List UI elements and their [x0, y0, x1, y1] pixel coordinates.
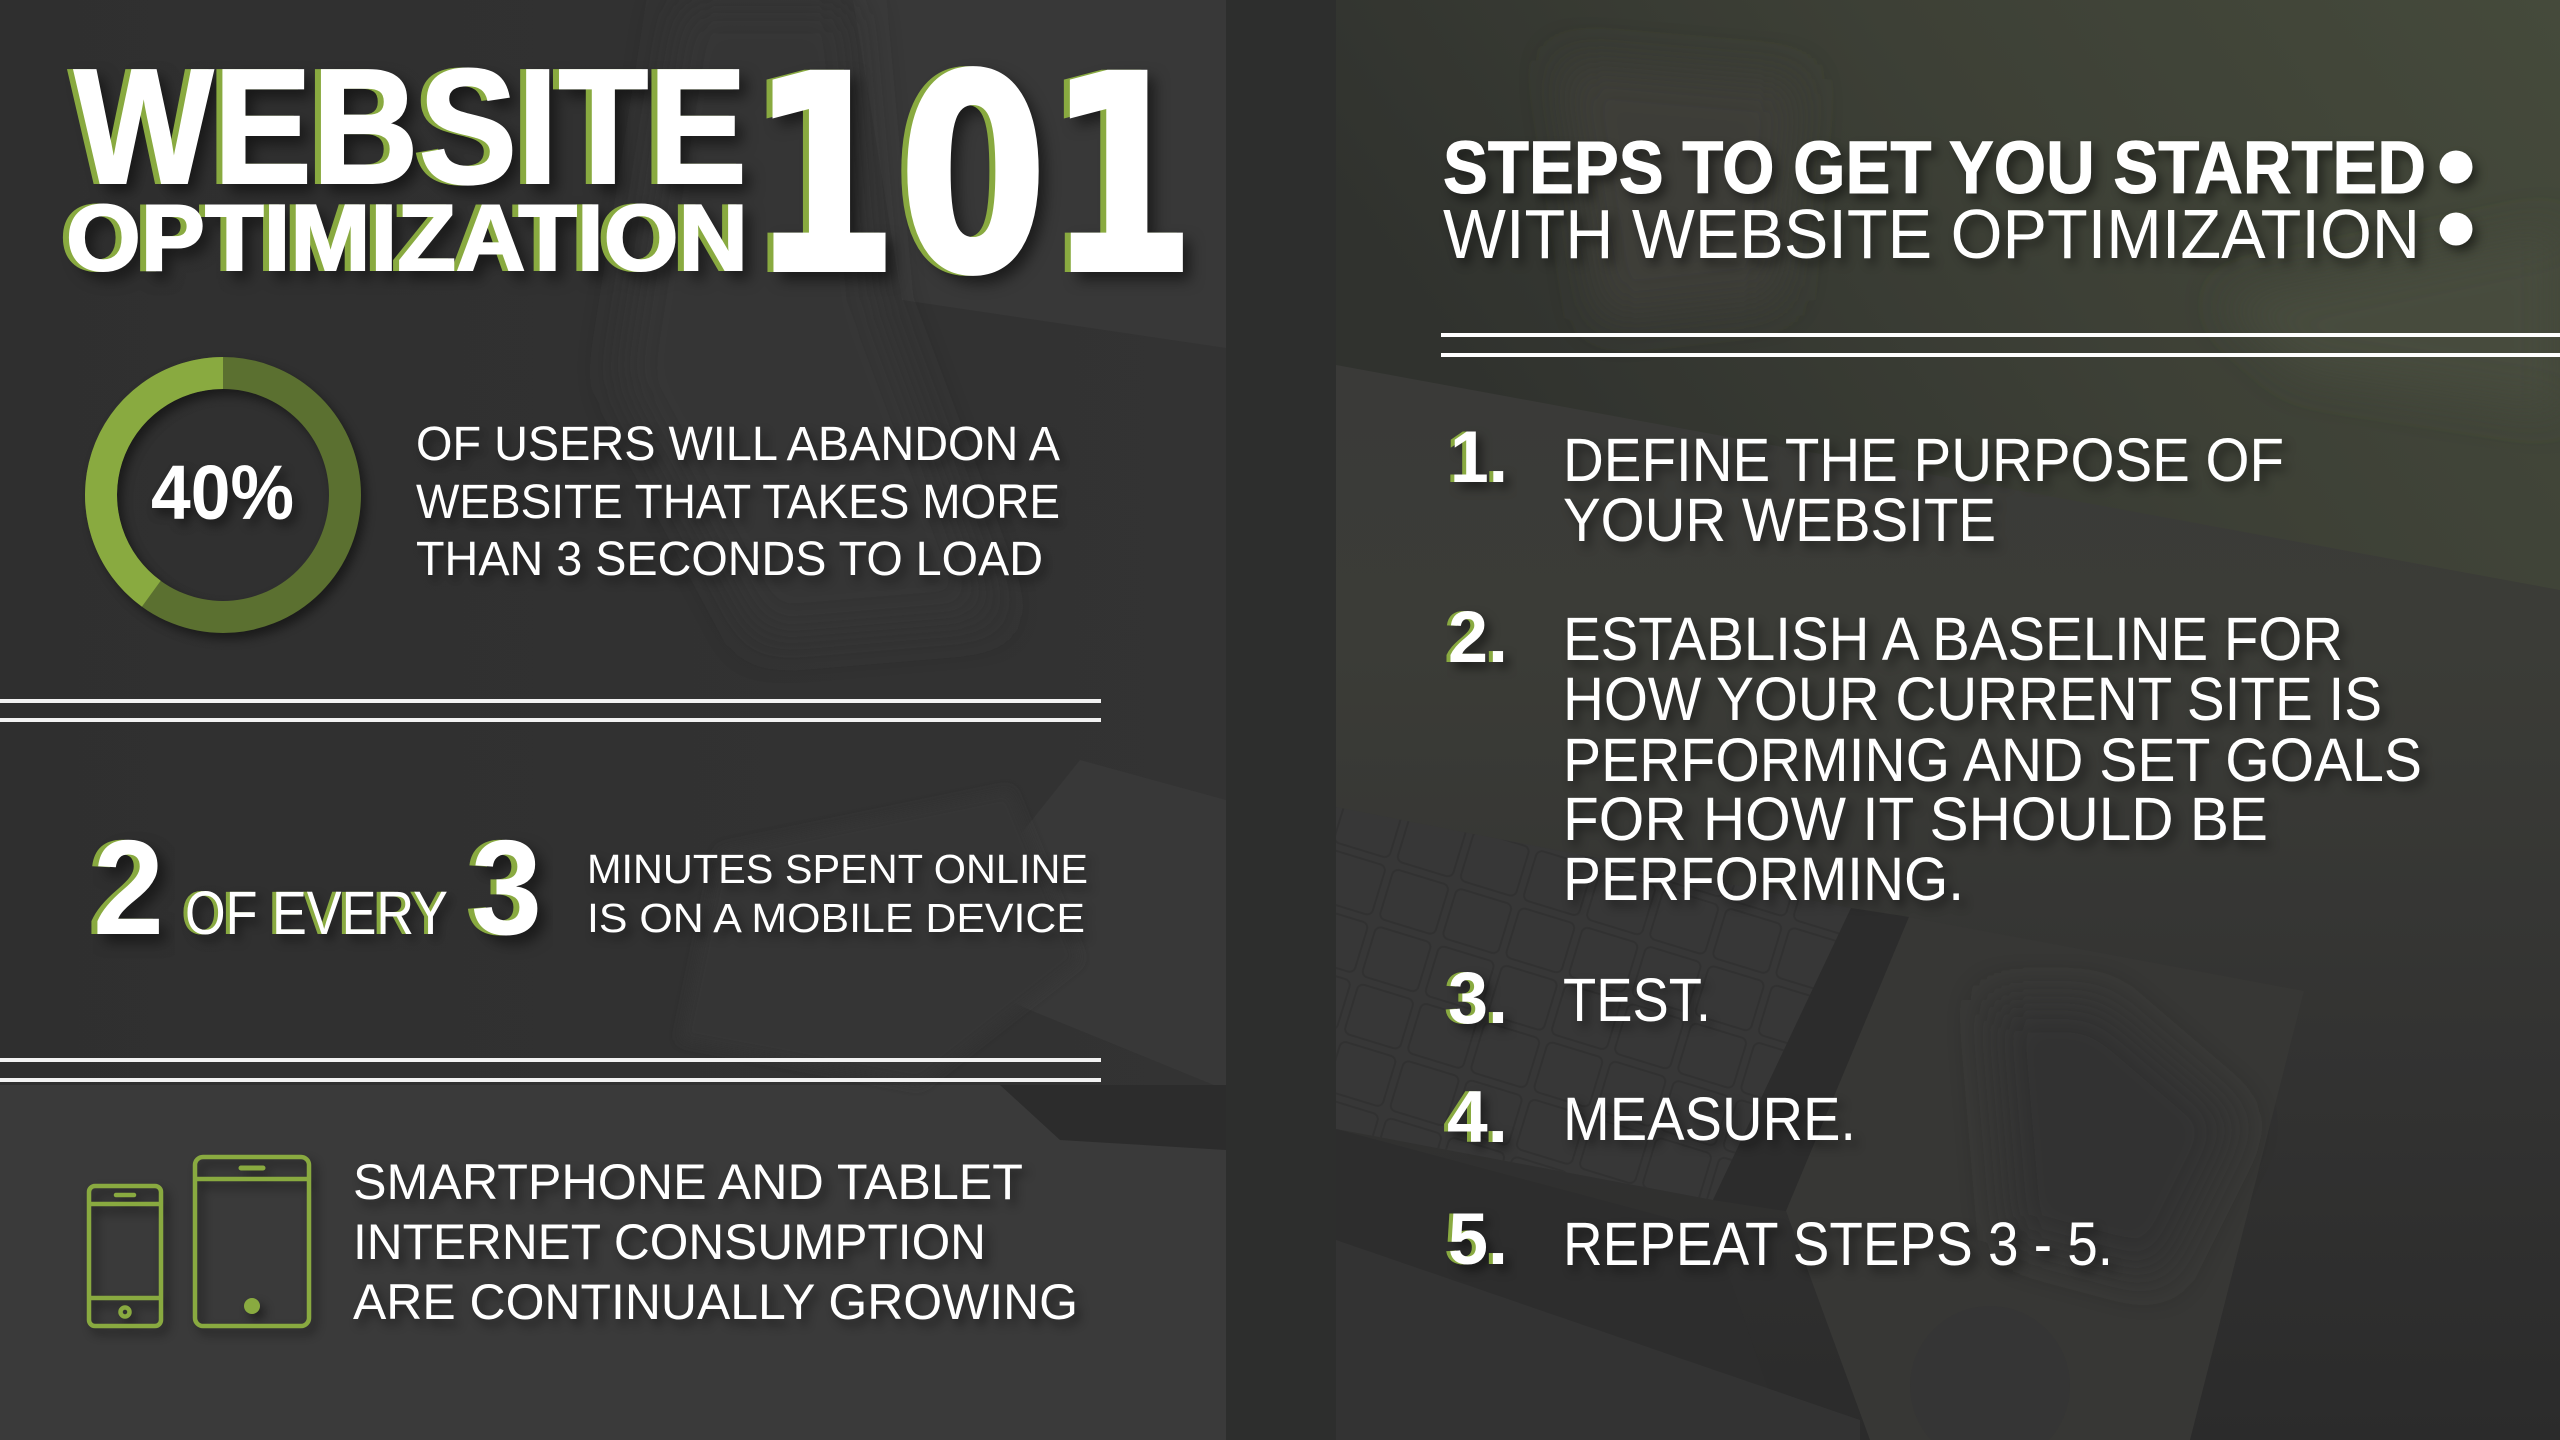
heading: steps to get you started: WITH WEBSITE OPTIMIZATION [1443, 195, 2420, 273]
title line: WEBSITE: WEBSITE [74, 35, 747, 218]
step 2: 2. [1448, 597, 1508, 678]
text: smartphone and tablet stat: ARE CONTINUALLY GROWING [353, 1274, 1078, 1330]
left: monitor and person [853, 0, 1226, 348]
left: keyboard and desk [0, 1085, 1226, 1440]
step 3: TEST. [1563, 966, 1711, 1034]
title line: OPTIMIZATION: OPTIMIZATION [66, 185, 748, 290]
text: smartphone and tablet stat: INTERNET CONSUMPTION [353, 1214, 986, 1270]
step 1: DEFINE THE PURPOSE OF [1563, 426, 2284, 494]
bullet [2440, 212, 2472, 246]
title: WEBSITE OPTIMIZATION 101 [66, 19, 1196, 335]
step 2: HOW YOUR CURRENT SITE IS [1563, 665, 2382, 733]
step 1: 1. [1450, 417, 1508, 498]
step 3: 3. [1448, 958, 1508, 1039]
text: abandon stat: OF USERS WILL ABANDON A [416, 418, 1060, 471]
stat: 40 percent donut [101, 373, 345, 617]
step 5: 5. [1448, 1199, 1508, 1280]
text: mobile minutes: IS ON A MOBILE DEVICE [587, 895, 1085, 941]
steps list [1447, 417, 2422, 1280]
text: abandon stat: THAN 3 SECONDS TO LOAD [416, 533, 1043, 586]
step 2 [1448, 597, 2422, 913]
donut value: 40% [151, 450, 294, 536]
words: of every: OF EVERY [185, 879, 448, 947]
text: mobile minutes: MINUTES SPENT ONLINE [587, 846, 1088, 892]
step 4: MEASURE. [1563, 1085, 1856, 1153]
text: smartphone and tablet stat: SMARTPHONE AND TABLET [353, 1154, 1023, 1210]
step 4 [1447, 1077, 1856, 1158]
step 4: 4. [1447, 1077, 1508, 1158]
step 5 [1448, 1199, 2113, 1280]
step 2: PERFORMING AND SET GOALS [1563, 726, 2422, 794]
step 2: FOR HOW IT SHOULD BE [1563, 785, 2268, 853]
step 1 [1450, 417, 2284, 554]
step 2: PERFORMING. [1563, 845, 1964, 913]
title number: 101: 101 [750, 19, 1196, 335]
icon: smartphone [89, 1186, 161, 1326]
numeral 3: 3 [471, 812, 542, 963]
icon: tablet [195, 1157, 309, 1326]
step 3 [1448, 958, 1711, 1039]
right: shirt highlights [2220, 230, 2560, 410]
step 1: YOUR WEBSITE [1563, 486, 1996, 554]
text: abandon stat [416, 418, 1060, 586]
text: mobile minutes [587, 846, 1088, 941]
text: smartphone and tablet stat [353, 1154, 1078, 1330]
donut chart [101, 373, 345, 617]
numeral 2: 2 [93, 812, 164, 963]
step 5: REPEAT STEPS 3 - 5. [1563, 1210, 2113, 1278]
text: abandon stat: WEBSITE THAT TAKES MORE [416, 476, 1060, 529]
heading: steps to get you started [1443, 126, 2472, 273]
stat: 2 of every 3 [93, 812, 542, 963]
step 2: ESTABLISH A BASELINE FOR [1563, 605, 2343, 673]
bullet [2440, 150, 2472, 184]
icons: phone and tablet [89, 1157, 309, 1326]
right: keyboard and note [1336, 807, 1851, 1200]
heading: steps to get you started: STEPS TO GET YOU STARTED [1443, 126, 2426, 209]
